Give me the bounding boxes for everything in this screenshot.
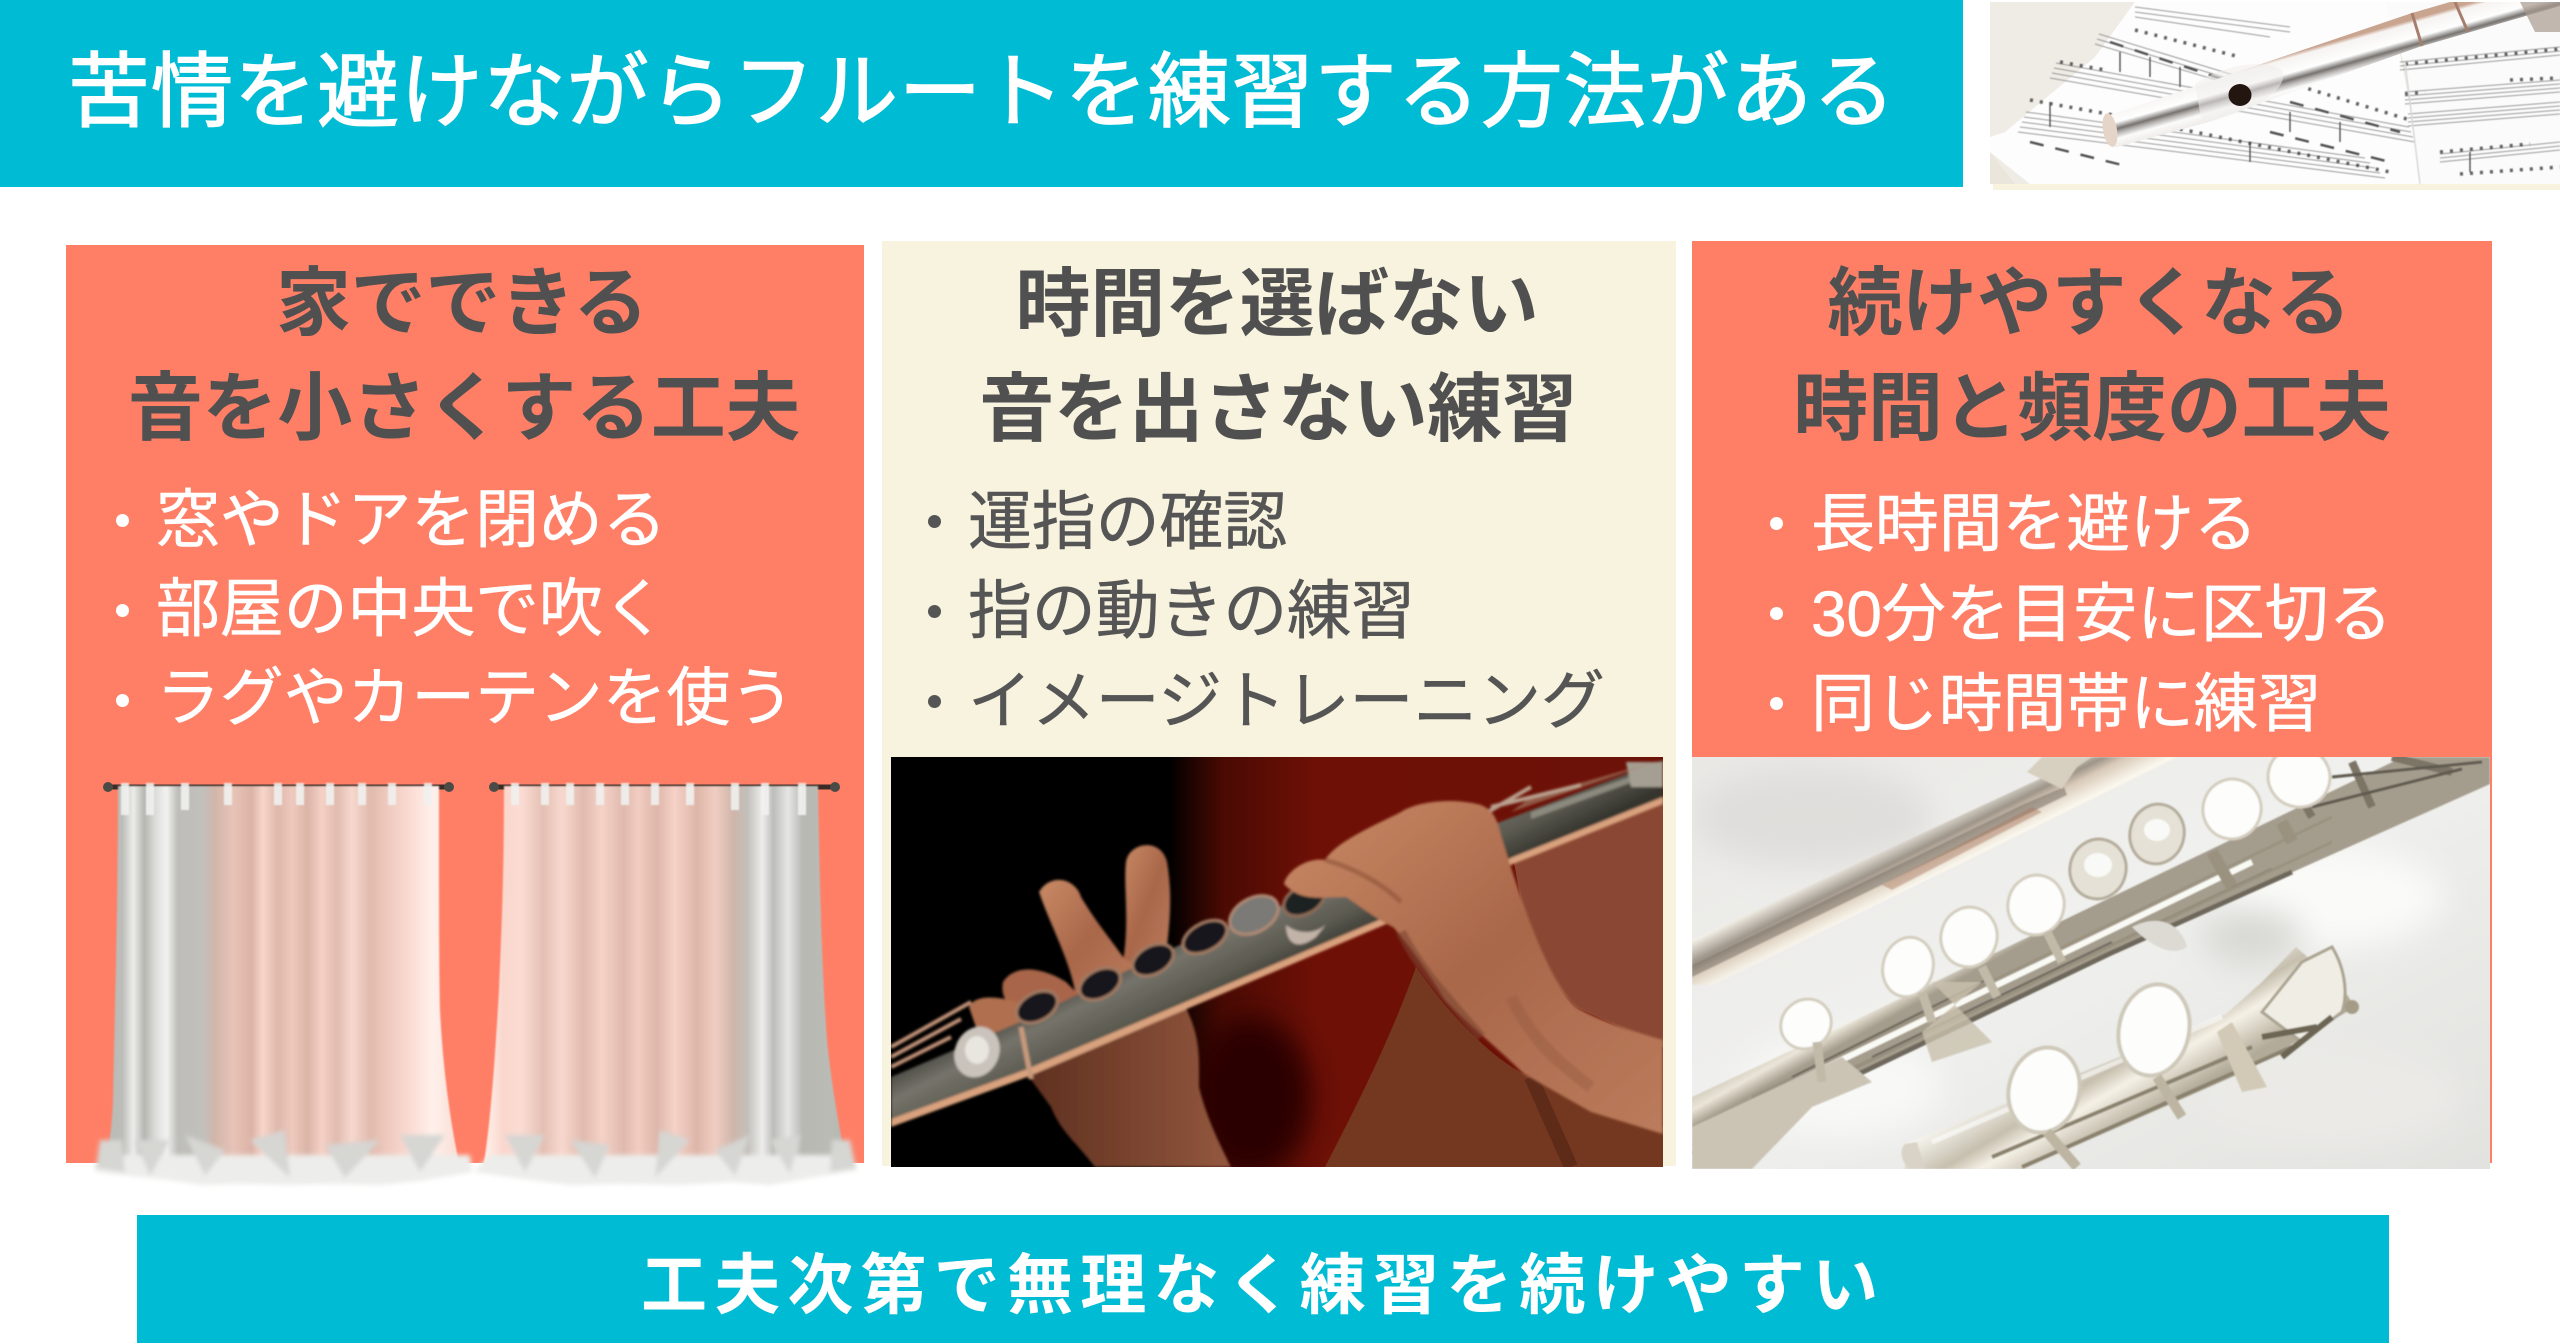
- panel heading: 続けやすくなる: [1828, 261, 2350, 345]
- keys: [1011, 913, 1233, 1030]
- lower flute: [1905, 947, 2355, 1169]
- bullet list: 運指の確認: [968, 486, 1287, 558]
- left hand fingers: [1121, 845, 1170, 972]
- bullet list: [928, 486, 1605, 737]
- panel heading: 時間を選ばない: [1016, 262, 1538, 346]
- panel: home noise reduction: [66, 245, 864, 1186]
- bullet list: 指の動きの練習: [968, 575, 1415, 647]
- panel: time and frequency: [1692, 241, 2492, 1163]
- bullet list: 窓やドアを閉める: [156, 484, 666, 556]
- shirt: [1513, 797, 1663, 1047]
- photo: hands playing flute: [891, 757, 1663, 1167]
- panel heading: 音を小さくする工夫: [128, 366, 800, 450]
- panel heading: [128, 261, 800, 450]
- summary text: 工夫次第で無理なく練習を続けやすい: [641, 1248, 1885, 1322]
- bullet list: 30分を目安に区切る: [1811, 578, 2392, 650]
- bullet list: ラグやカーテンを使う: [156, 662, 794, 734]
- title banner: [0, 0, 1963, 187]
- bullet list: 長時間を避ける: [1811, 488, 2258, 560]
- key mechanism: [2292, 757, 2452, 817]
- bullet list: イメージトレーニング: [968, 665, 1605, 737]
- bullet list: 部屋の中央で吹く: [156, 573, 666, 645]
- bullet list: 同じ時間帯に練習: [1811, 668, 2321, 740]
- panel heading: [1793, 261, 2391, 450]
- illustration: sheer curtains: [93, 782, 858, 1186]
- photo: flute on sheet music: [1990, 2, 2560, 190]
- title text: 苦情を避けながらフルートを練習する方法がある: [68, 47, 1896, 138]
- lower palm: [1027, 1004, 1231, 1167]
- bullet list: [1770, 488, 2392, 740]
- bullet list: [116, 484, 794, 734]
- panel heading: [979, 262, 1577, 451]
- panel heading: 音を出さない練習: [979, 367, 1577, 451]
- panel: silent practice: [882, 241, 1676, 1166]
- bottom summary banner: [137, 1215, 2389, 1343]
- photo: silver flute parts: [1692, 757, 2490, 1169]
- upper tube: [1692, 757, 2178, 985]
- flute body: [891, 760, 1663, 1119]
- panel heading: 時間と頻度の工夫: [1793, 366, 2391, 450]
- middle flute body: [1692, 757, 2490, 1169]
- panel heading: 家でできる: [276, 261, 648, 345]
- right hand: [1284, 801, 1663, 1134]
